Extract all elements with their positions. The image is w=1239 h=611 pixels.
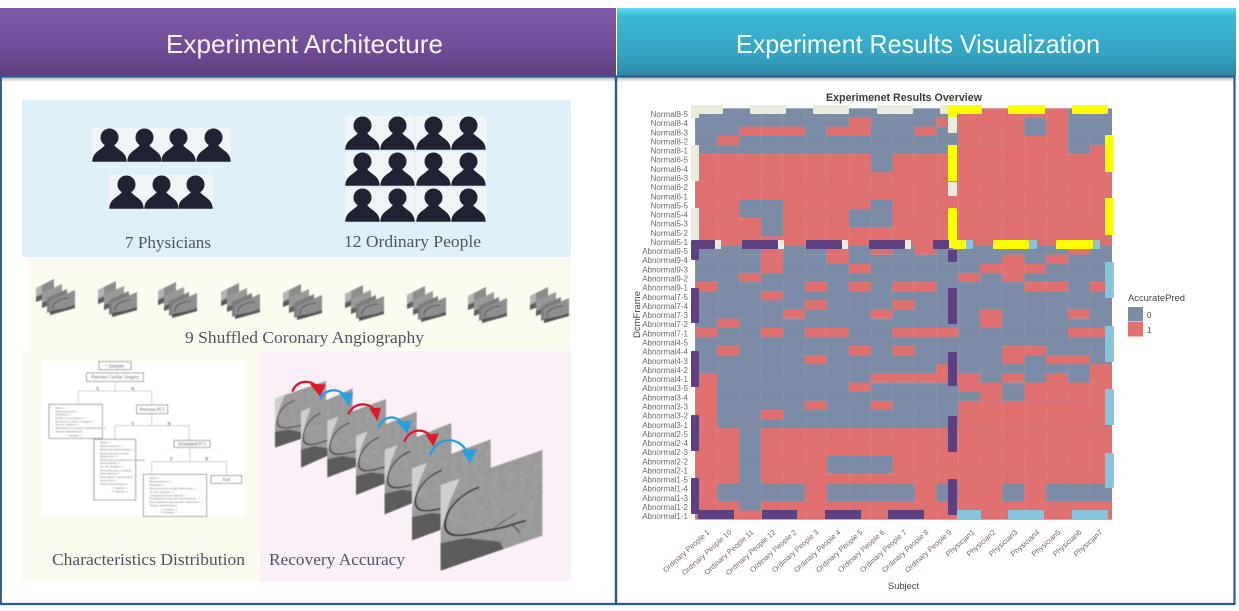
label: 7 Physicians: 7 Physicians [125,233,211,252]
y axis labels: Abnormal9-2 [642,274,689,284]
arrows: red and blue transitions [292,382,477,464]
y axis labels: Normal8-3 [651,128,689,137]
decision tree flowchart: Y [170,458,174,463]
icons: 9 angiography stacks [36,279,569,323]
y axis labels: Normal5-2 [651,229,689,238]
y axis labels [642,110,689,521]
decision tree flowchart: Post-infarct myocardial [100,475,133,479]
angiography frame sequence [275,381,542,571]
decision tree flowchart: Hypertension: 1 [100,444,123,448]
chart title: Experimenet Results Overview [826,92,983,104]
label: 12 Ordinary People: 12 Ordinary People [344,232,481,251]
y axis labels: Abnormal2-5 [642,430,689,439]
label: Characteristics Distribution: Characteristics Distribution [52,550,246,569]
decision tree flowchart: Previous Cardiac Surgery [91,376,140,381]
y axis labels: Abnormal3-1 [642,421,689,430]
decision tree flowchart: Previous PCI [140,408,165,413]
legend: AccuratePred: AccuratePred [1128,293,1185,304]
panel: recovery accuracy [260,351,571,582]
y axis labels: Normal6-1 [651,192,689,201]
x axis labels: Ordinary People 5 [814,528,864,574]
decision tree flowchart [49,362,242,516]
decision tree flowchart: Male: 1 [55,406,66,410]
x axis labels: Physician3 [987,528,1019,558]
panel: participants [22,100,571,257]
header: Experiment Results Visualization [617,8,1236,76]
decision tree flowchart: Mechanical vascular intervention: 1 [149,497,200,501]
y axis labels: Normal6-2 [651,183,689,192]
x axis labels: Ordinary People 7 [858,528,908,574]
icons: 7 physicians [92,128,231,209]
decision tree flowchart: At rest Angina: 1 [100,465,124,469]
legend: AccuratePred [1128,293,1185,336]
y axis labels: Normal5-3 [651,220,689,229]
x axis labels: Ordinary People 12 [724,528,777,577]
decision tree flowchart: N [205,458,209,463]
y axis labels: Normal5-5 [651,201,689,210]
header: Experiment Results Visualization: Experiment Results Visualization [736,29,1100,59]
decision tree flowchart: infarction: 1 [100,478,117,482]
y axis labels: Normal8-1 [651,147,689,156]
x axis labels: Ordinary People 11 [702,528,755,577]
decision tree flowchart: At rest Angina: 1 [149,490,173,494]
legend: AccuratePred: 0 [1147,311,1152,320]
y axis labels: Abnormal2-2 [642,457,689,466]
y axis labels: Normal5-1 [651,238,689,247]
label: Recovery Accuracy: Recovery Accuracy [269,550,405,569]
decision tree flowchart: Hypercholesterolemia: 1 [100,448,135,452]
x axis labels: Physician4 [1009,528,1041,558]
y axis labels: Abnormal7-5 [642,293,689,302]
header: Experiment Architecture: Experiment Architecture [166,29,443,59]
x axis labels: Physician6 [1051,528,1083,558]
decision tree flowchart: Hypertension: 1 [149,480,172,484]
decision tree flowchart: Y [96,388,100,393]
y axis labels: Normal6-3 [651,174,689,183]
decision tree flowchart: Vessel Distribution: [55,429,83,433]
decision tree flowchart: At rest Angina: 1 [55,423,79,427]
y axis labels: Abnormal1-5 [642,476,689,485]
decision tree flowchart: Hypertension: 1 [55,409,78,413]
x axis labels: Ordinary People 8 [880,528,930,574]
y axis labels: Abnormal2-1 [642,466,689,476]
y axis title: DcmFrame [632,291,643,338]
y axis labels: Abnormal9-3 [642,265,689,274]
decision tree flowchart: Mechanical vascular intervention: 1 [55,426,106,430]
x axis labels: Ordinary People 9 [903,528,953,574]
y axis labels: Abnormal4-5 [642,338,689,348]
y axis labels: Abnormal4-2 [642,366,689,375]
decision tree flowchart: Male: 1 [149,476,160,480]
header: Experiment Architecture [0,8,616,76]
decision tree flowchart: Index of procedure: 1 [55,416,86,420]
x axis labels: Ordinary People 4 [792,528,842,574]
purple dashes: ordinary people on abnormal frames [691,240,957,519]
y axis labels: Abnormal9-1 [642,284,689,293]
y axis labels: Abnormal9-5 [642,247,689,256]
y axis labels: Abnormal7-4 [642,302,689,311]
decision tree flowchart: Congestive heart failure: 1 [149,493,187,497]
y axis labels: Abnormal1-2 [642,503,689,512]
x axis labels: Ordinary People 1 [661,528,711,574]
label: 9 Shuffled Coronary Angiography: 9 Shuffled Coronary Angiography [185,328,425,347]
y axis labels: Abnormal4-1 [642,375,689,384]
y axis labels: Normal5-4 [651,210,689,220]
panel: shuffled coronary angiography [27,257,571,350]
x axis labels: Ordinary People 6 [836,528,886,574]
decision tree flowchart: 3 Vessels: 1 [112,489,128,493]
decision tree flowchart: Percutaneous coronary [100,468,132,472]
y axis labels: Abnormal9-4 [642,256,689,265]
y axis labels: Normal6-5 [651,156,689,165]
decision tree flowchart: 1 Vessels: 1 [161,507,177,511]
decision tree flowchart: Previous percutaneous coronary [100,458,145,462]
decision tree flowchart: Y [131,422,135,427]
y axis labels: Abnormal3-2 [642,412,689,421]
decision tree flowchart: Scheduled PCI [178,442,206,447]
y axis labels: Normal8-5 [651,110,689,119]
y axis labels: Abnormal2-4 [642,439,689,448]
decision tree flowchart: N [131,388,135,393]
y axis labels: Abnormal2-3 [642,448,689,457]
x axis labels: Ordinary People 3 [770,528,820,574]
light blue dashes: physicians on abnormal frames [957,240,1114,519]
decision tree flowchart: 2 Vessels: 1 [112,486,128,490]
chart: experiment results heatmap [632,92,1185,592]
decision tree flowchart: Vessel Distribution: [100,482,128,486]
decision tree flowchart: intervention: 1 [100,471,121,475]
decision tree flowchart: 2 Vessels: 1 [161,511,177,515]
y axis labels: Normal8-2 [651,137,689,146]
y axis labels: Abnormal3-4 [642,393,689,402]
decision tree flowchart: infarction: 1 [100,454,117,458]
decision tree flowchart: N [168,422,172,427]
icons: 12 ordinary people [345,116,486,222]
y axis labels: Abnormal7-2 [642,320,689,329]
x axis labels: Physician5 [1030,528,1062,558]
y axis labels: Abnormal7-3 [642,311,689,320]
decision tree flowchart: • Samples [106,364,124,369]
decision tree flowchart: Vessel Distribution: [149,503,177,507]
annotation: dashed group outlines [691,105,1114,519]
y axis labels: Abnormal4-4 [642,348,689,357]
y axis labels: Abnormal3-3 [642,402,689,412]
x axis labels: Ordinary People 10 [680,528,733,577]
y axis labels: Abnormal3-5 [642,384,689,393]
decision tree flowchart: Diabetes: 1 [55,413,71,417]
x axis labels [661,528,1104,577]
y axis labels: Abnormal1-1 [642,512,689,521]
decision tree flowchart: Male: 1 [100,440,111,444]
decision tree flowchart: Diabetes: 1 [149,483,165,487]
yellow dashes: physicians on normal frames [948,105,1114,249]
y axis labels: Abnormal4-3 [642,357,689,366]
x axis labels: Physician7 [1072,528,1104,558]
decision tree flowchart: Previous myocardial [100,451,129,455]
y axis labels: Normal6-4 [651,165,689,174]
decision tree flowchart: End [223,478,231,483]
panel: characteristics distribution [22,350,260,582]
x axis labels: Physician1 [944,528,976,558]
decision tree flowchart: intervention: 1 [100,461,121,465]
y axis labels: Normal8-4 [651,119,689,128]
decision tree flowchart: Percutaneous myocardial infarction: 1 [149,500,203,504]
x axis labels: Physician2 [965,528,997,558]
y axis labels: Abnormal7-1 [642,329,689,338]
x axis title: Subject [888,581,919,592]
decision tree flowchart: Previous Cardiac Surgery: 1 [55,419,95,423]
heatmap cells [695,108,1112,520]
y axis labels: Abnormal1-4 [642,485,689,494]
y axis labels: Abnormal1-3 [642,494,689,503]
decision tree flowchart: Previous myocardial infarction: 1 [149,487,196,491]
x axis labels: Ordinary People 2 [748,528,798,574]
pale dashes: ordinary people on normal frames [691,105,957,249]
legend: AccuratePred: 1 [1147,326,1152,335]
decision tree flowchart: 1 Vessels: 1 [66,433,83,437]
